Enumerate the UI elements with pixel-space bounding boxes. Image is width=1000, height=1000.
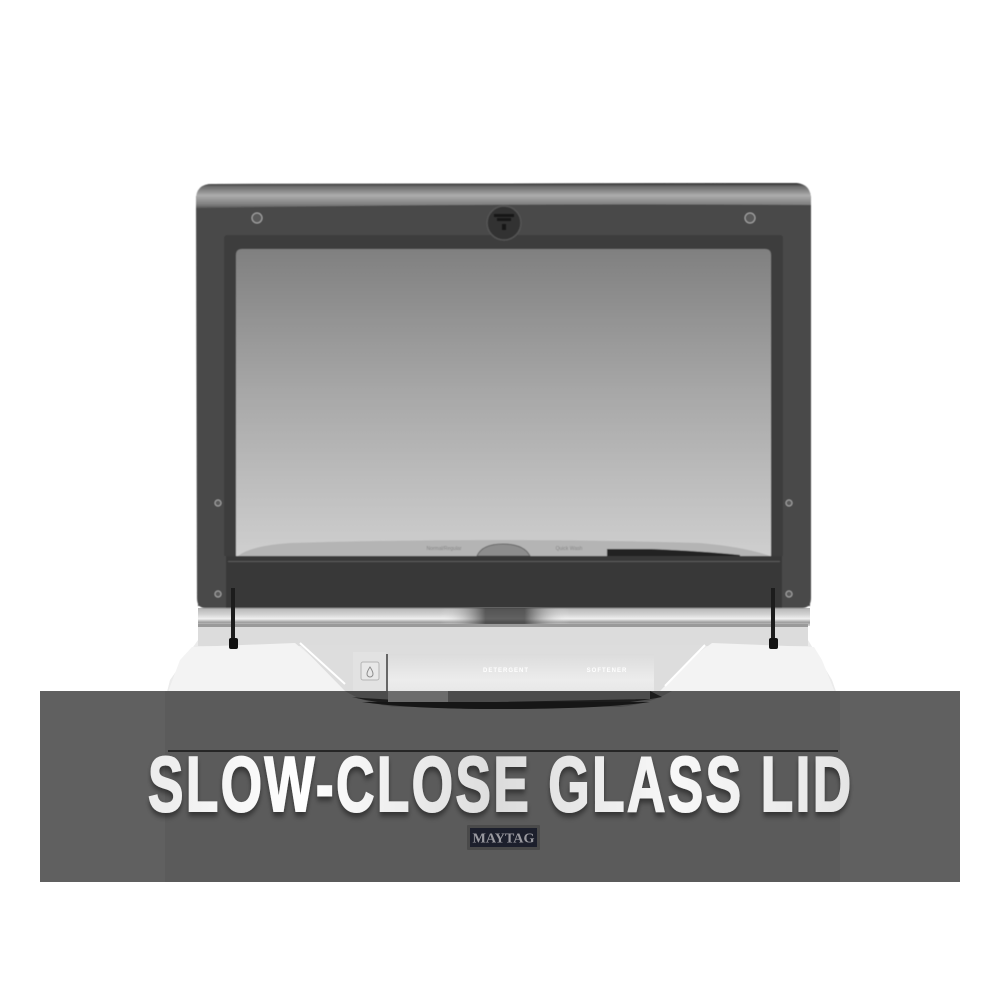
lower lid handle band [226,556,782,608]
screws [215,213,792,597]
Maytag badge [467,825,540,850]
title: SLOW-CLOSE GLASS LID [148,742,851,829]
washer seen through banner [40,691,960,882]
right hinge arm [769,588,778,649]
detergent and softener dispenser: DETERGENT [483,668,529,674]
left hinge arm [229,588,238,649]
console seen through glass: Normal/Regular [426,546,462,552]
console seen through glass [238,540,770,556]
title banner background [40,691,960,882]
lid top rim [196,183,811,208]
glass window [236,249,771,556]
detergent and softener dispenser: SOFTENER [587,668,627,674]
washer lower body and console [160,608,846,882]
Maytag badge: MAYTAG [472,832,535,846]
raised lid frame [196,183,811,608]
icon: water drop button [367,667,373,677]
console seen through glass: Quick Wash [556,546,583,552]
detergent and softener dispenser [353,652,654,706]
lid latch [487,206,521,240]
